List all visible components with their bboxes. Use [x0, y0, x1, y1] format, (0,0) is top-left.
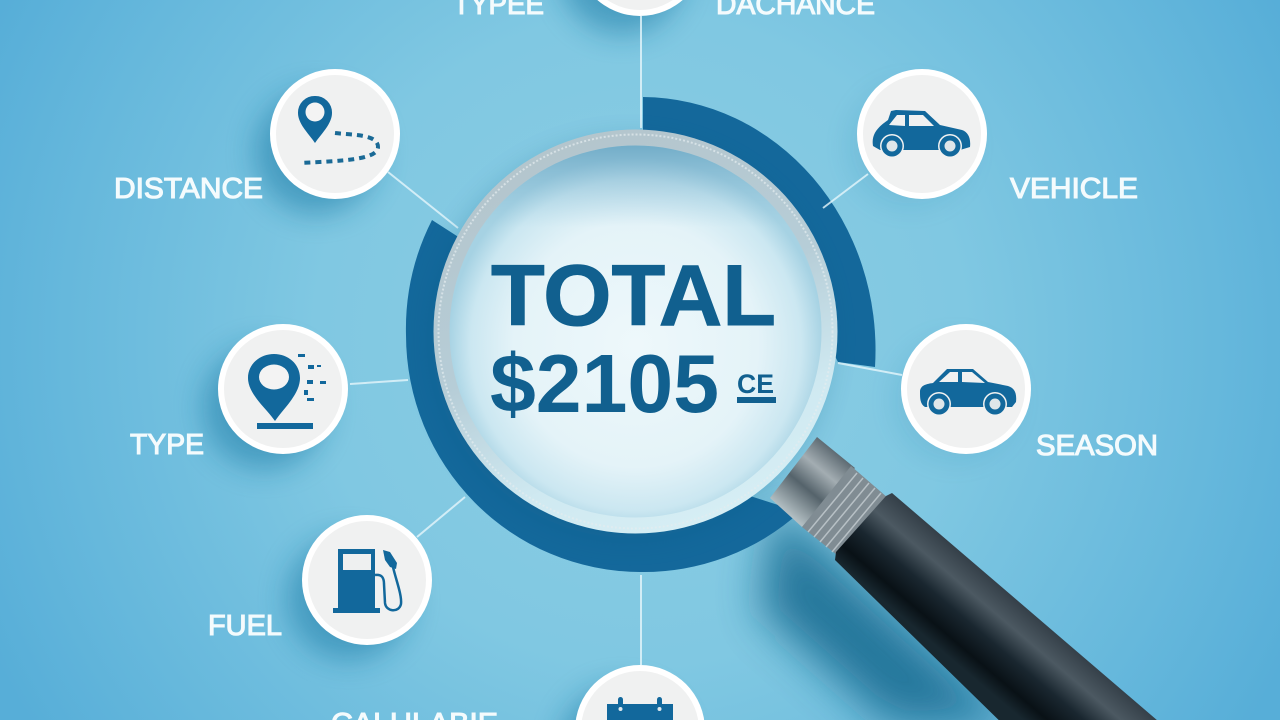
handle neck: [770, 437, 855, 527]
amount: $2105: $2105: [490, 337, 719, 430]
connector lines: [350, 16, 902, 665]
magnifier lens: [434, 130, 838, 534]
node: fuel: [302, 515, 432, 645]
label: TYPE: TYPE: [130, 429, 204, 461]
lens glass: [450, 146, 822, 518]
label: DISTANCE: DISTANCE: [114, 173, 263, 205]
lens shadow: [432, 142, 828, 538]
handle grip: [835, 493, 1172, 720]
handle shadow: [760, 505, 1015, 720]
lens rim: [434, 130, 838, 534]
node: season: [901, 324, 1031, 454]
node: calendar: [575, 665, 705, 720]
ring segment: upper right: [643, 97, 876, 367]
icon: pin on base: [248, 354, 326, 429]
ring segment: left and bottom: [406, 220, 800, 572]
label: FUEL: FUEL: [208, 610, 282, 642]
icon: route pin: [298, 96, 378, 163]
node: vehicle: [857, 69, 987, 199]
icon: calendar: [607, 697, 673, 720]
small currency mark: CE: [737, 369, 774, 399]
node: type: [218, 324, 348, 454]
headline: TOTAL: TOTAL: [491, 248, 776, 344]
node: top: [453, 0, 705, 21]
magnifier handle: [770, 437, 1172, 720]
node: distance: [270, 69, 400, 199]
icon: fuel pump: [333, 549, 401, 613]
label: VEHICLE: VEHICLE: [1010, 173, 1138, 205]
icon: sedan: [920, 369, 1016, 416]
handle ribbed collar: [802, 466, 888, 555]
progress ring: [406, 97, 876, 572]
label: SEASON: SEASON: [1036, 430, 1158, 462]
icon: suv: [873, 110, 970, 158]
shadows of the icon circles: [203, 0, 1013, 720]
